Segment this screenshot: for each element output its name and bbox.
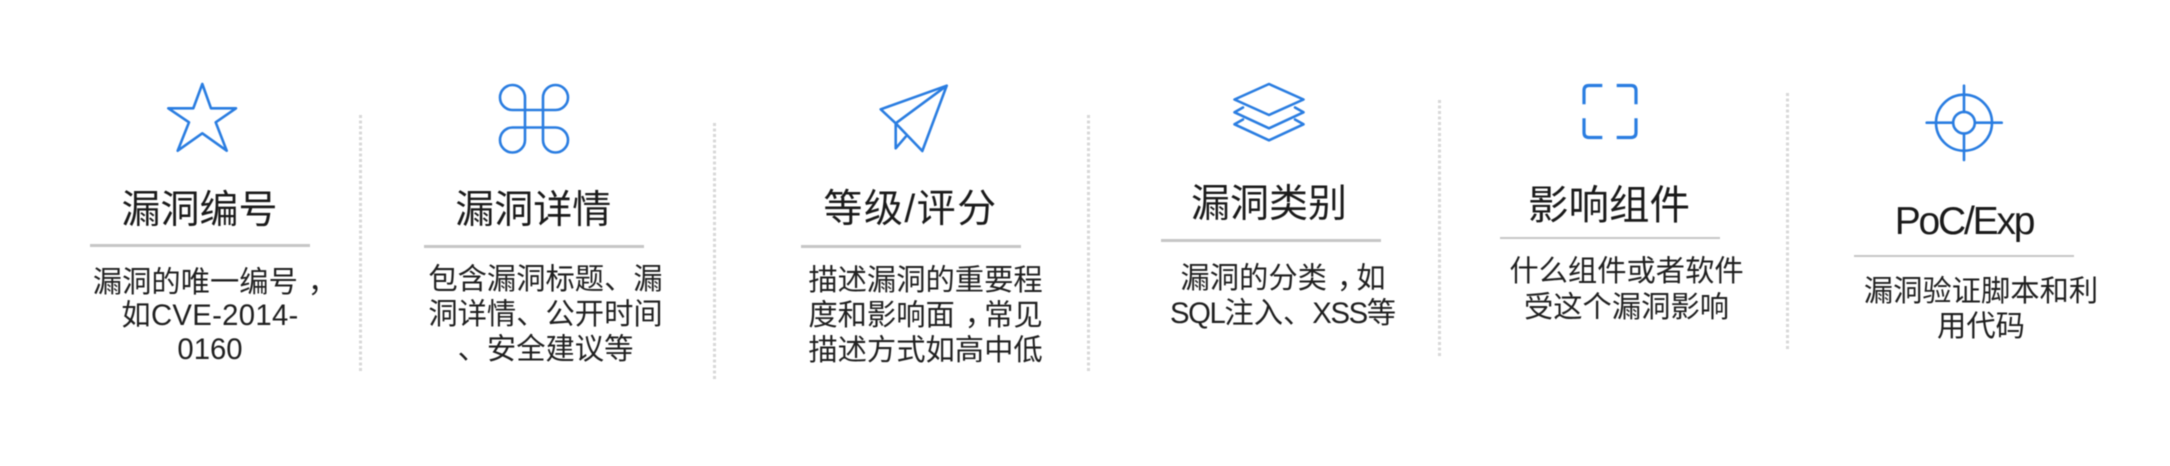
heading underline	[1854, 255, 2074, 257]
description text: 如CVE-2014-	[121, 299, 299, 332]
icon: crosshair target	[1924, 84, 2004, 162]
description text: 包含漏洞标题、漏	[428, 263, 663, 296]
heading: 等级/评分	[823, 188, 998, 231]
panel: 影响组件	[1500, 83, 1744, 324]
heading underline	[801, 245, 1021, 248]
icon: command symbol	[498, 83, 570, 154]
description text: 描述方式如高中低	[808, 334, 1043, 366]
description text	[1170, 262, 1396, 330]
description text: 描述漏洞的重要程	[808, 264, 1043, 296]
description text	[1509, 254, 1744, 324]
description text: 用代码	[1937, 310, 2025, 343]
heading: 漏洞类别	[1191, 183, 1347, 226]
description text: 洞详情、公开时间	[428, 298, 663, 331]
description text	[808, 264, 1043, 366]
description text	[93, 266, 337, 366]
panel: 等级/评分	[800, 84, 1043, 366]
description text: 漏洞验证脚本和利	[1864, 275, 2098, 308]
heading: PoC/Exp	[1895, 200, 2033, 243]
heading: 漏洞详情	[455, 189, 611, 232]
icon: paper plane	[878, 84, 949, 154]
heading underline	[1500, 237, 1720, 239]
heading underline	[424, 245, 644, 248]
icon: focus brackets	[1582, 83, 1638, 140]
panel: 漏洞类别	[1160, 82, 1396, 330]
description text	[428, 263, 663, 366]
description text: 漏洞的唯一编号 ，	[93, 266, 337, 299]
heading underline	[1161, 239, 1381, 242]
description text: 0160	[177, 333, 243, 366]
description text: 什么组件或者软件	[1509, 254, 1744, 288]
heading: 漏洞编号	[121, 188, 278, 232]
heading: 影响组件	[1528, 182, 1690, 228]
description text: 度和影响面 ，常见	[808, 298, 1043, 332]
description text: SQL注入、XSS等	[1170, 297, 1396, 330]
description text	[1864, 275, 2098, 343]
panel: PoC/Exp	[1854, 84, 2098, 343]
description text: 受这个漏洞影响	[1524, 290, 1729, 324]
description text: 、安全建议等	[458, 333, 633, 366]
heading underline	[90, 244, 310, 246]
icon: stacked layers	[1232, 82, 1306, 142]
panel: 漏洞编号	[90, 82, 337, 366]
panel: 漏洞详情	[424, 83, 663, 366]
description text: 漏洞的分类 ，如	[1180, 262, 1386, 295]
icon: star	[166, 82, 238, 153]
